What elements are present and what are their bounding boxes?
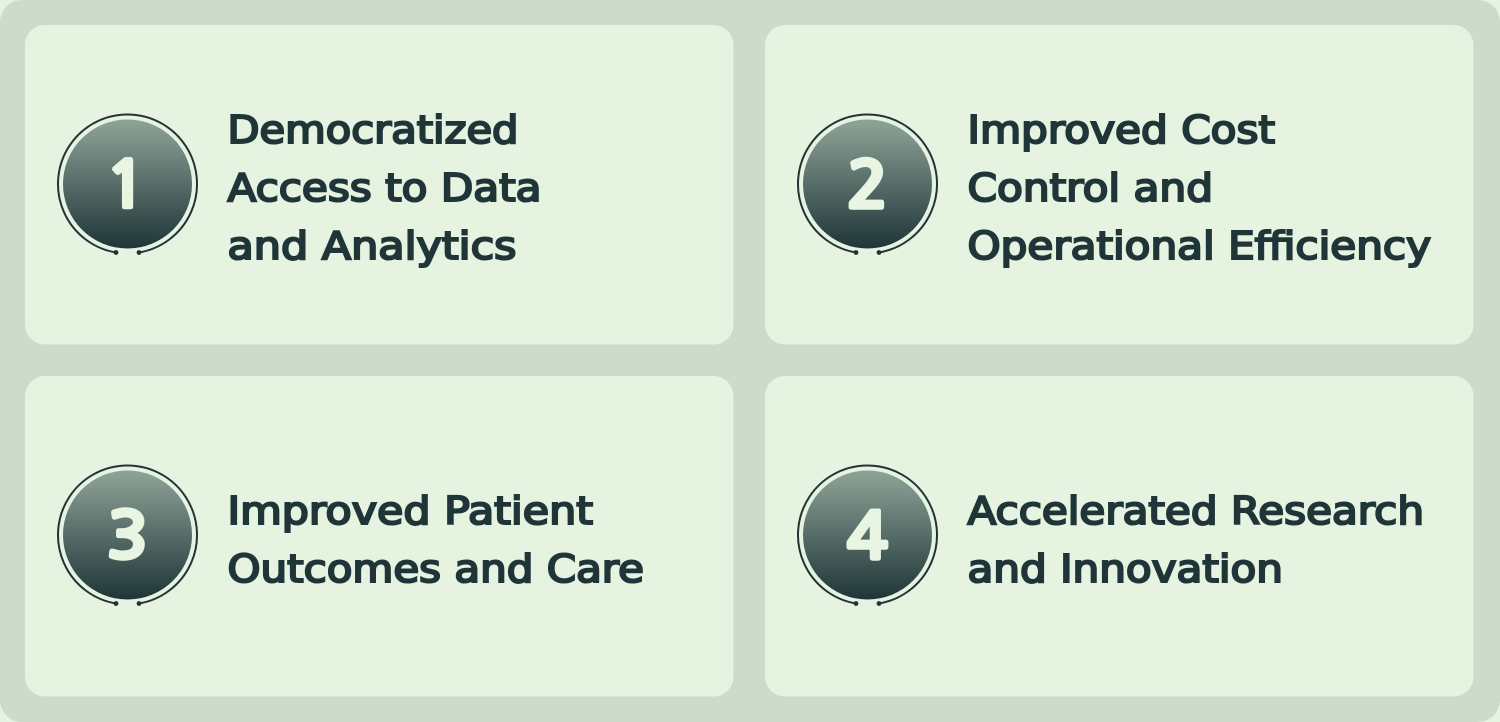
panel: card 4 [765, 376, 1474, 696]
panel: card 1 [25, 25, 734, 344]
heading: card 4: Accelerated Research [968, 489, 1424, 533]
icon: number badge 3: 3 [106, 504, 148, 568]
icon: number badge 4: 4 [846, 504, 888, 568]
heading: card 4 [968, 489, 1424, 591]
icon: number badge 3 [58, 465, 197, 606]
heading: card 3: Improved Patient [228, 489, 593, 533]
heading: card 1: Access to Data [228, 166, 542, 210]
heading: card 1: and Analytics [228, 224, 516, 268]
icon: number badge 1 [58, 114, 197, 255]
panel: card 3 [25, 376, 734, 696]
icon: number badge 4 [798, 465, 937, 606]
heading: card 3: Outcomes and Care [228, 547, 644, 591]
heading: card 1: Democratized [228, 108, 518, 152]
heading: card 2: Operational Efficiency [968, 224, 1431, 268]
heading: card 1 [228, 108, 542, 268]
icon: number badge 2 [798, 114, 937, 255]
icon: number badge 2: 2 [846, 154, 888, 218]
icon: number badge 1: 1 [105, 154, 147, 218]
heading: card 2 [968, 108, 1431, 268]
heading: card 3 [228, 489, 644, 591]
heading: card 2: Improved Cost [968, 108, 1275, 152]
heading: card 4: and Innovation [968, 547, 1283, 591]
heading: card 2: Control and [968, 166, 1213, 210]
panel: card 2 [765, 25, 1474, 344]
